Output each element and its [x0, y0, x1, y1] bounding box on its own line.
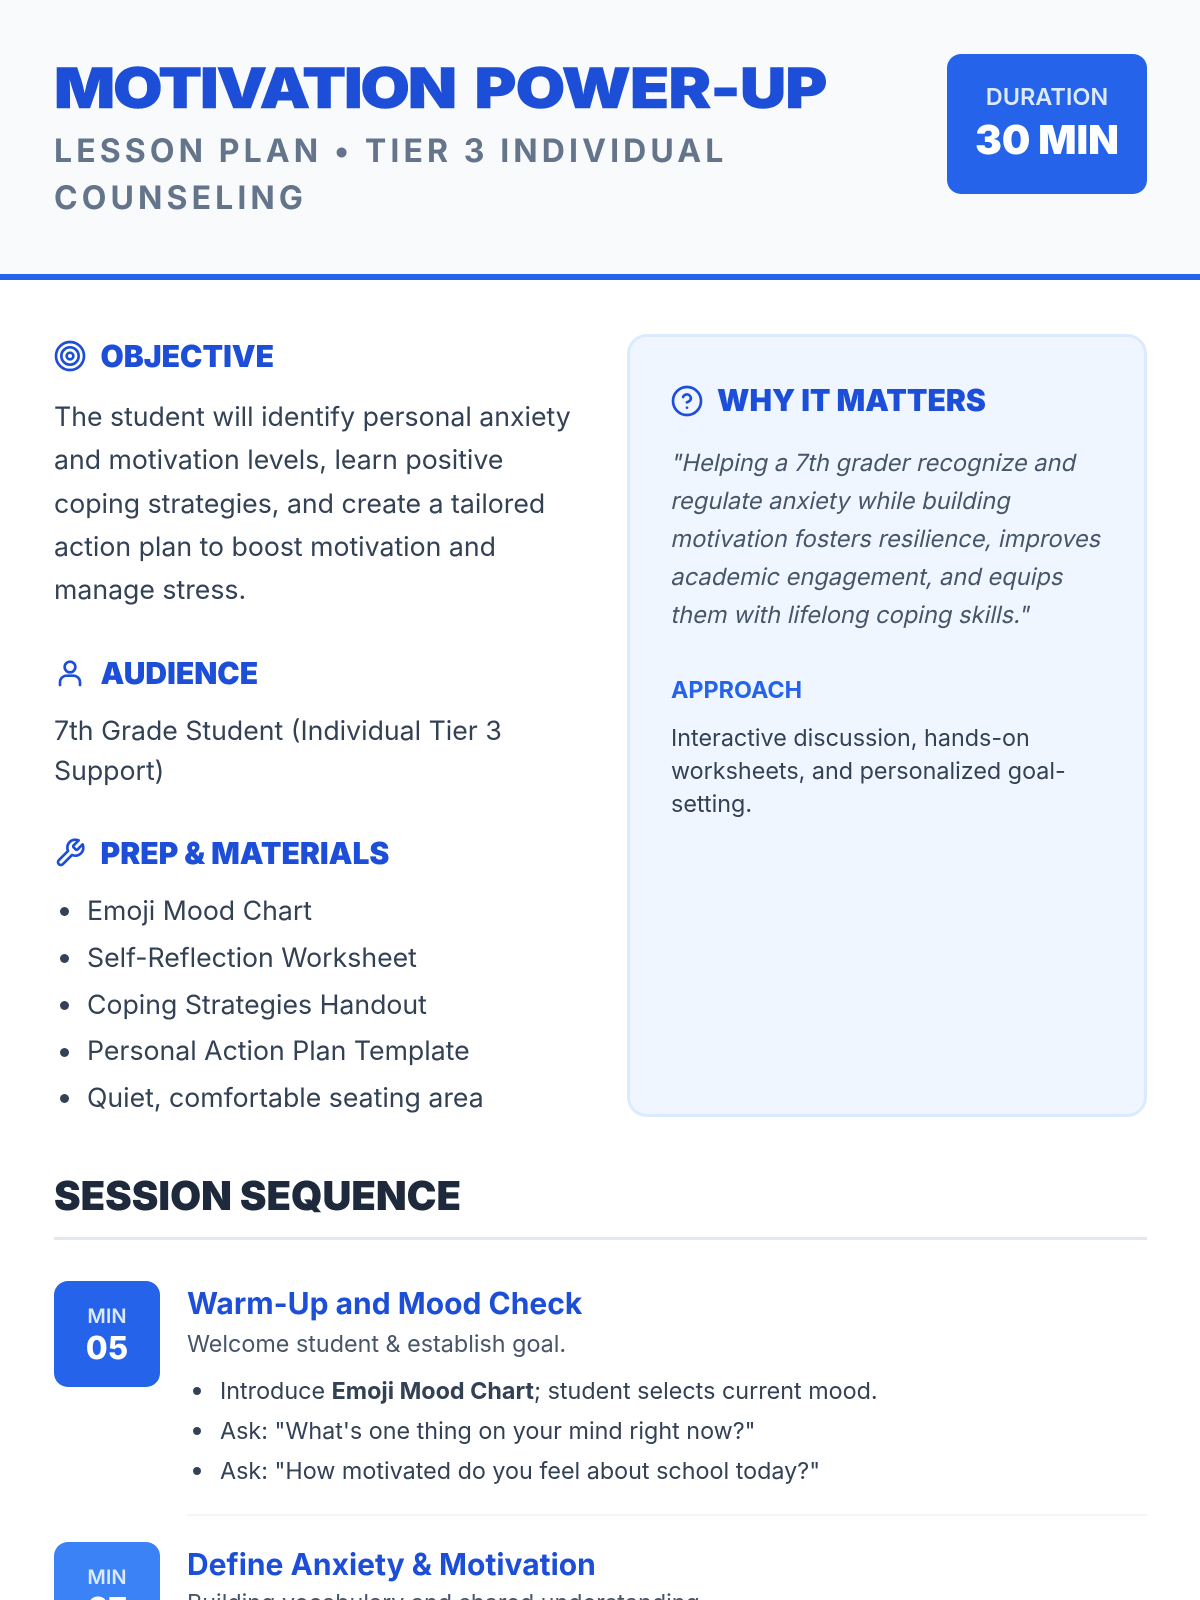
- quote: motivation fosters resilience, improves: [669, 524, 1104, 553]
- duration label: DURATION: [986, 82, 1108, 111]
- step 1 time tile: [54, 1281, 160, 1387]
- min label: MIN: [87, 1565, 127, 1589]
- subtitle: LESSON PLAN • TIER 3 INDIVIDUAL: [54, 131, 727, 170]
- panel: why it matters: [627, 334, 1147, 1117]
- duration badge: [947, 54, 1147, 194]
- heading: audience: AUDIENCE: [100, 656, 258, 692]
- audience text: 7th Grade Student (Individual Tier 3: [54, 715, 502, 747]
- duration value: 30 MIN: [975, 115, 1119, 164]
- heading: approach: APPROACH: [671, 675, 802, 704]
- heading: prep and materials: PREP & MATERIALS: [100, 836, 389, 872]
- step 2 title: Define Anxiety & Motivation: [187, 1547, 596, 1583]
- approach text: [671, 723, 1066, 818]
- step 1 summary: Welcome student & establish goal.: [187, 1329, 566, 1358]
- approach text: worksheets, and personalized goal-: [671, 756, 1066, 785]
- icon: target: [54, 340, 86, 372]
- icon: user: [58, 660, 82, 686]
- materials list: Quiet, comfortable seating area: [87, 1082, 484, 1114]
- step divider: [187, 1514, 1147, 1516]
- heading: why it matters: WHY IT MATTERS: [717, 383, 986, 419]
- audience text: Support): [54, 755, 164, 787]
- quote: regulate anxiety while building: [669, 486, 1014, 515]
- heading: session sequence: SESSION SEQUENCE: [54, 1171, 461, 1220]
- header band: [0, 0, 1200, 280]
- objective text: action plan to boost motivation and: [54, 531, 496, 563]
- step 1 title: Warm-Up and Mood Check: [187, 1286, 582, 1322]
- step 1 list: Ask: "What's one thing on your mind right now?": [220, 1416, 756, 1445]
- step 1 list: [193, 1376, 878, 1485]
- materials list: Personal Action Plan Template: [87, 1035, 470, 1067]
- subtitle: [54, 131, 727, 217]
- materials list: Coping Strategies Handout: [87, 989, 427, 1021]
- icon: question mark: [672, 386, 702, 416]
- quote: [669, 448, 1104, 629]
- objective text: and motivation levels, learn positive: [54, 444, 503, 476]
- objective text: [54, 401, 571, 606]
- step 1 list: Ask: "How motivated do you feel about school today?": [220, 1456, 820, 1485]
- title: MOTIVATION POWER-UP: [54, 54, 827, 122]
- step 1 list: Introduce Emoji Mood Chart; student selects current mood.: [220, 1376, 878, 1405]
- materials list: Emoji Mood Chart: [87, 895, 312, 927]
- minute number: 05: [86, 1328, 128, 1367]
- min label: MIN: [87, 1304, 127, 1328]
- objective text: The student will identify personal anxiety: [54, 401, 571, 433]
- materials list: [60, 895, 484, 1114]
- objective text: coping strategies, and create a tailored: [54, 488, 545, 520]
- icon: wrench: [56, 838, 85, 866]
- quote: "Helping a 7th grader recognize and: [669, 448, 1079, 477]
- heading: objective: OBJECTIVE: [100, 339, 274, 375]
- approach text: setting.: [671, 789, 752, 818]
- materials list: Self-Reflection Worksheet: [87, 942, 417, 974]
- quote: academic engagement, and equips: [669, 562, 1067, 591]
- audience text: [54, 715, 502, 787]
- subtitle: COUNSELING: [54, 178, 307, 217]
- objective text: manage stress.: [54, 574, 246, 606]
- step 2 time tile: [54, 1542, 160, 1600]
- quote: them with lifelong coping skills.": [669, 600, 1033, 629]
- approach text: Interactive discussion, hands-on: [671, 723, 1030, 752]
- rule under session sequence: [54, 1237, 1147, 1240]
